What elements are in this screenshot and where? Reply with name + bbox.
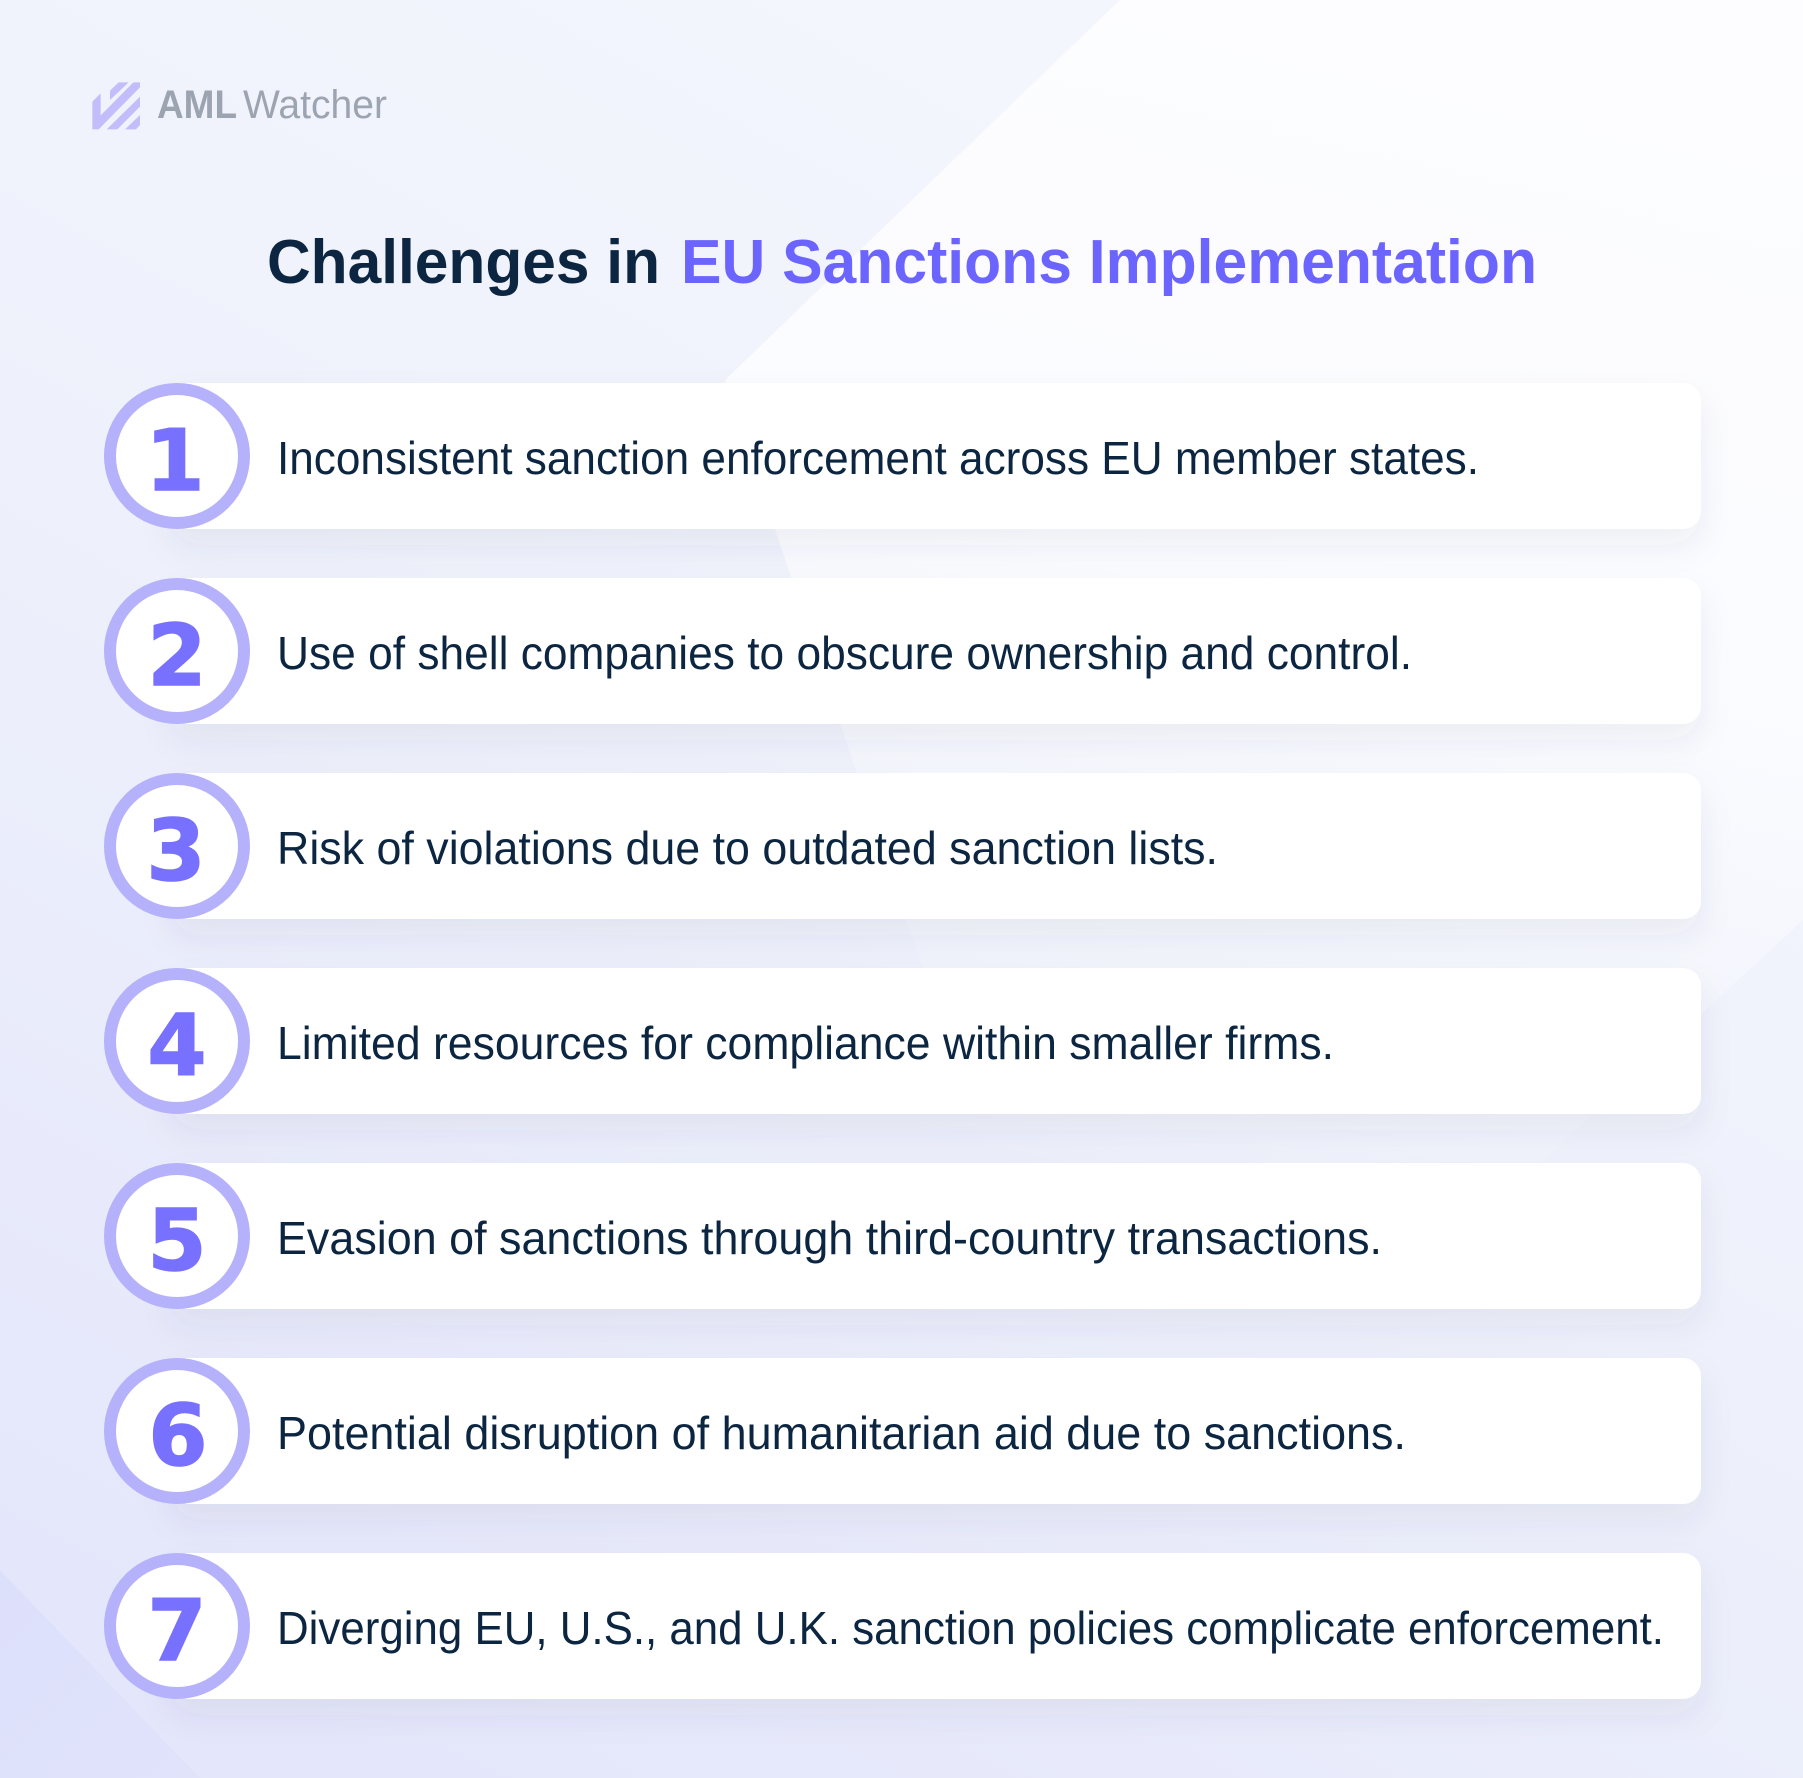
icon: logo mark [92,82,140,129]
badge: number 7: 7 [147,1582,207,1681]
badge: number 1: 1 [145,412,205,511]
panel: challenge 4 [110,968,1701,1114]
panel: challenge 3 [110,773,1701,919]
logo wordmark: Watcher [243,83,387,127]
panel: challenge 7 [110,1553,1701,1699]
badge: number 6 [110,1364,244,1498]
badge: number 3: 3 [146,802,206,901]
text: challenge 2: Use of shell companies to obscure ownership and control. [277,627,1412,679]
badge: number 5: 5 [147,1192,207,1291]
badge: number 2: 2 [147,607,207,706]
badge: number 4 [110,974,244,1108]
badge: number 3 [110,779,244,913]
text: challenge 1: Inconsistent sanction enforcement across EU member states. [277,432,1479,484]
logo wordmark [157,83,387,127]
panel: challenge 1 [110,383,1701,529]
panel: challenge 5 [110,1163,1701,1309]
logo wordmark: AML [157,83,237,127]
text: challenge 4: Limited resources for compliance within smaller firms. [277,1017,1334,1069]
title: EU Sanctions Implementation [681,228,1537,297]
text: challenge 3: Risk of violations due to outdated sanction lists. [277,822,1218,874]
panel: challenge 2 [110,578,1701,724]
text: challenge 7: Diverging EU, U.S., and U.K. sanction policies complicate enforcement. [277,1602,1664,1654]
panel: challenge 6 [110,1358,1701,1504]
logo: AML Watcher [92,82,387,129]
text: challenge 6: Potential disruption of humanitarian aid due to sanctions. [277,1407,1406,1459]
badge: number 5 [110,1169,244,1303]
badge: number 4: 4 [147,997,207,1096]
badge: number 2 [110,584,244,718]
badge: number 1 [110,389,244,523]
title: Challenges in [267,228,660,297]
text: challenge 5: Evasion of sanctions through third-country transactions. [277,1212,1382,1264]
badge: number 7 [110,1559,244,1693]
badge: number 6: 6 [148,1387,208,1486]
title [267,228,1537,297]
